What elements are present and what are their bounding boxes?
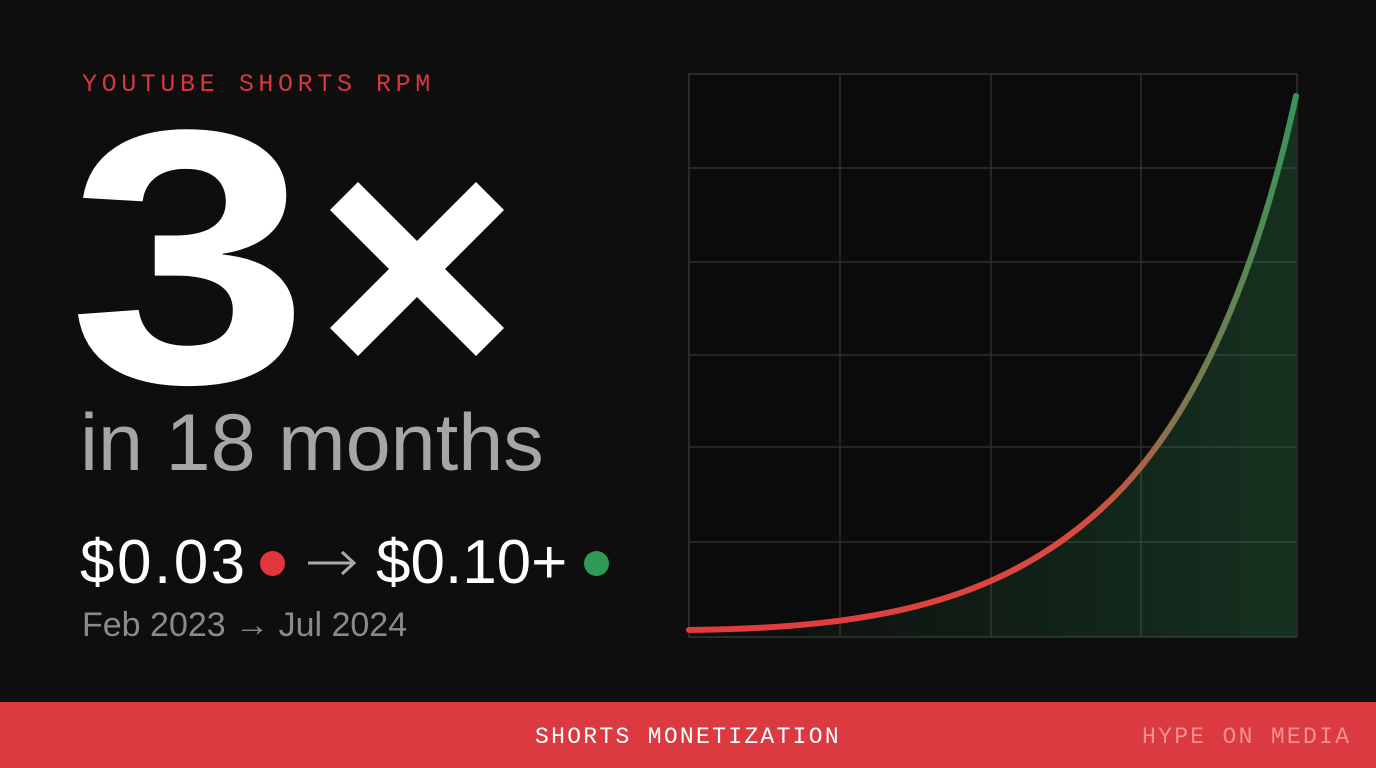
big number 3: 3	[68, 54, 310, 459]
red dot	[260, 551, 285, 576]
footer label: SHORTS MONETIZATION	[535, 724, 841, 750]
start price: $0.03	[80, 528, 248, 597]
curve	[689, 96, 1296, 630]
green dot	[584, 551, 609, 576]
brand: HYPE ON MEDIA	[1142, 724, 1351, 750]
footer bar	[0, 702, 1376, 768]
end price: $0.10+	[376, 528, 567, 597]
date range: Feb 2023 → Jul 2024	[82, 606, 407, 644]
arrow	[308, 551, 356, 575]
price change row	[80, 528, 609, 597]
icon: multiplication cross	[330, 182, 504, 356]
subtitle: in 18 months	[80, 398, 544, 488]
eyebrow title: YOUTUBE SHORTS RPM	[82, 70, 435, 99]
area fill	[689, 96, 1296, 637]
